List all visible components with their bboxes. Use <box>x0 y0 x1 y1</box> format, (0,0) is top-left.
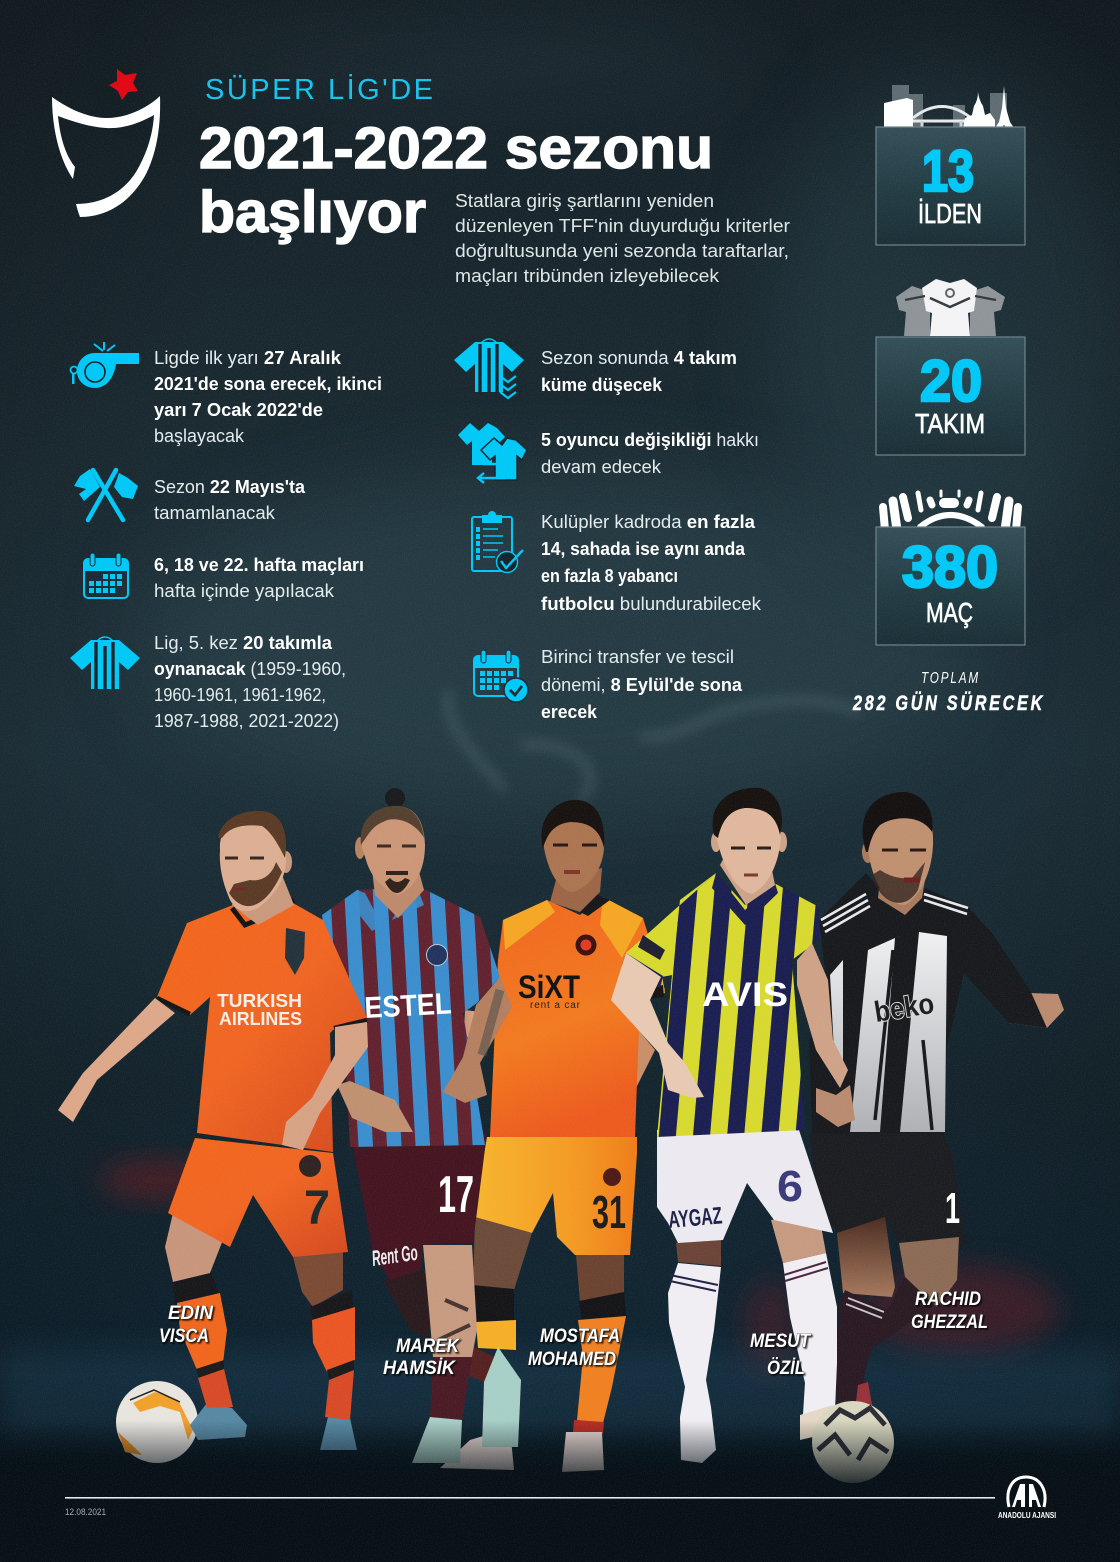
text: midweek weeks: 6, 18 ve 22. hafta maçları <box>154 555 364 575</box>
logo: Süper Lig shield and star <box>52 69 160 217</box>
player: Edin Visca: AIRLINES <box>219 1009 302 1029</box>
text: 20 teams: 1987-1988, 2021-2022) <box>154 711 339 731</box>
icon: stadium <box>883 491 1018 530</box>
panel: 380 matches <box>876 527 1025 645</box>
text: transfer window: erecek <box>541 702 598 722</box>
text: first half: yarı 7 Ocak 2022'de <box>154 400 323 420</box>
player: Mostafa Mohamed <box>440 800 665 1472</box>
icon: shirts swap <box>458 423 527 483</box>
text: season end: tamamlanacak <box>154 503 276 523</box>
icon: jersey relegation <box>454 339 524 398</box>
panel: 380 matches: MAÇ <box>926 597 973 628</box>
player: Marek Hamsik: 17 <box>438 1166 474 1224</box>
text: first half: başlayacak <box>154 426 245 446</box>
text: foreign players: en fazla 8 yabancı <box>541 566 678 586</box>
player names: MOSTAFA <box>540 1326 620 1347</box>
player: Marek Hamsik: Rent Go <box>370 1240 419 1271</box>
player: Rachid Ghezzal: 1 <box>945 1184 960 1233</box>
player: Mostafa Mohamed: 31 <box>592 1186 626 1238</box>
text: 20 teams: 1960-1961, 1961-1962, <box>154 685 326 705</box>
icon: whistle <box>70 342 139 388</box>
logo: Anadolu Ajansı: ANADOLU AJANSI <box>998 1510 1056 1520</box>
icon: city skyline <box>884 85 1014 128</box>
player names: EDIN <box>168 1303 214 1324</box>
text: relegation: küme düşecek <box>541 375 663 395</box>
text: substitutions <box>541 430 759 477</box>
text: substitutions: 5 oyuncu değişikliği hakkı <box>541 430 759 450</box>
icon: clipboard <box>472 511 523 572</box>
icon: three jerseys <box>896 279 1005 336</box>
intro text: maçları tribünden izleyebilecek <box>455 266 720 286</box>
text: total duration: 282 GÜN SÜRECEK <box>852 692 1045 715</box>
text: foreign players <box>541 512 762 614</box>
player: Marek Hamsik: ESTEL <box>364 987 452 1025</box>
player: Mesut Özil <box>611 788 848 1463</box>
player: Mostafa Mohamed: rent a car <box>530 1000 581 1011</box>
footer rule <box>65 1497 995 1499</box>
text: first half: 2021'de sona erecek, ikinci <box>154 374 382 394</box>
title <box>199 116 713 245</box>
text: total duration <box>852 670 1045 715</box>
player names: ÖZİL <box>767 1358 805 1379</box>
player: Edin Visca <box>58 811 368 1450</box>
panel: 20 teams <box>876 337 1025 455</box>
text: season end: Sezon 22 Mayıs'ta <box>154 477 306 497</box>
text: foreign players: futbolcu bulundurabilecek <box>541 594 762 614</box>
player: Rachid Ghezzal: beko <box>872 988 936 1029</box>
player: Marek Hamsik <box>322 788 521 1463</box>
player: Mostafa Mohamed: SiXT <box>518 969 580 1005</box>
intro text: doğrultusunda yeni sezonda taraftarlar, <box>455 241 789 261</box>
player names: GHEZZAL <box>911 1312 988 1333</box>
text: 20 teams: oynanacak (1959-1960, <box>154 659 346 679</box>
player: Mesut Özil: AYGAZ <box>667 1202 723 1234</box>
text: relegation <box>541 348 737 395</box>
panel: 13 cities <box>876 127 1025 245</box>
player names: MOHAMED <box>528 1349 616 1370</box>
player: Edin Visca: TURKISH <box>217 991 302 1011</box>
text: first half <box>154 348 382 446</box>
player: Mesut Özil: 6 <box>777 1162 803 1211</box>
text: transfer window: Birinci transfer ve tescil <box>541 647 734 667</box>
panel: 13 cities: İLDEN <box>918 198 982 229</box>
panel: 20 teams: 20 <box>920 349 982 414</box>
bottom fade <box>0 1420 1120 1562</box>
kicker heading: SÜPER LİG'DE <box>205 73 435 106</box>
player: Mesut Özil: AVIS <box>702 976 788 1014</box>
text: 20 teams <box>154 633 346 731</box>
date: 12.08.2021 <box>65 1507 106 1518</box>
player names <box>159 1289 988 1379</box>
text: transfer window: dönemi, 8 Eylül'de sona <box>541 675 743 695</box>
text: 20 teams: Lig, 5. kez 20 takımla <box>154 633 333 653</box>
intro text <box>455 191 790 286</box>
player: Edin Visca: 7 <box>304 1182 330 1235</box>
text: midweek weeks <box>154 555 364 601</box>
football: left ball <box>116 1381 198 1463</box>
intro text: Statlara giriş şartlarını yeniden <box>455 191 714 211</box>
player names: RACHID <box>915 1289 981 1310</box>
player names: HAMSİK <box>383 1358 456 1379</box>
intro text: düzenleyen TFF'nin duyurduğu kriterler <box>455 216 790 236</box>
text: season end <box>154 477 306 523</box>
text: foreign players: Kulüpler kadroda en fazla <box>541 512 756 532</box>
title: başlıyor <box>199 180 426 245</box>
icon: crossed flags <box>74 469 138 520</box>
icon: calendar check <box>474 650 528 702</box>
panel: 20 teams: TAKIM <box>915 408 985 439</box>
text: transfer window <box>541 647 743 722</box>
player names: MAREK <box>396 1336 460 1357</box>
player names: VISCA <box>159 1326 209 1347</box>
panel: 13 cities: 13 <box>922 139 974 204</box>
text: relegation: Sezon sonunda 4 takım <box>541 348 737 368</box>
player: Rachid Ghezzal <box>809 792 1064 1410</box>
text: foreign players: 14, sahada ise aynı anda <box>541 539 746 559</box>
player names: MESUT <box>750 1331 811 1352</box>
icon: calendar <box>84 553 128 598</box>
football: right ball <box>812 1401 894 1483</box>
text: substitutions: devam edecek <box>541 457 662 477</box>
text: total duration: TOPLAM <box>921 670 980 687</box>
logo: Anadolu Ajansı <box>998 1477 1056 1520</box>
title: 2021-2022 sezonu <box>199 116 713 181</box>
icon: striped jersey <box>70 637 140 689</box>
text: first half: Ligde ilk yarı 27 Aralık <box>154 348 342 368</box>
panel: 380 matches: 380 <box>902 535 998 600</box>
text: midweek weeks: hafta içinde yapılacak <box>154 581 335 601</box>
